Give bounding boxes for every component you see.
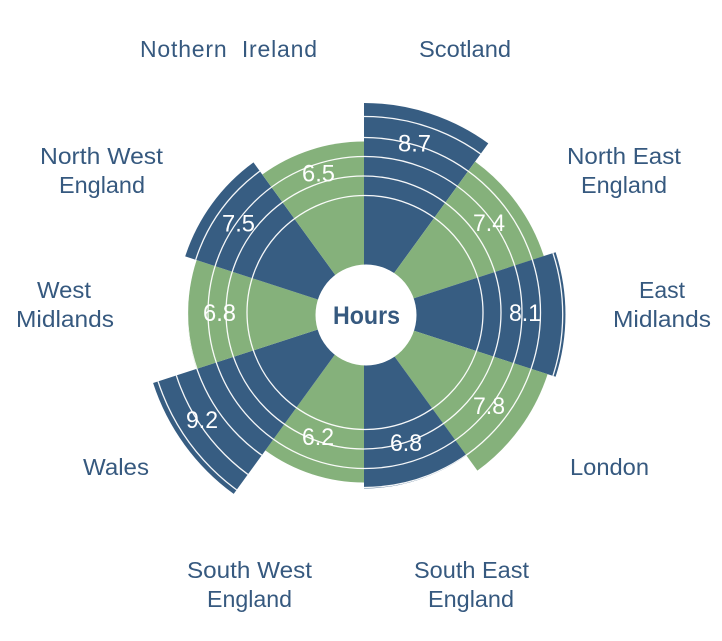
label: Wales: Wales bbox=[83, 454, 149, 480]
label: East Midlands bbox=[613, 277, 711, 332]
centre label: Hours bbox=[333, 302, 400, 330]
value: Wales: 9.2 bbox=[186, 407, 218, 434]
value: East Midlands: 8.1 bbox=[509, 300, 541, 327]
value: West Midlands: 6.8 bbox=[203, 300, 236, 327]
label: East Midlands: Midlands bbox=[613, 306, 711, 332]
wedge: London bbox=[364, 314, 548, 471]
value: South East England: 6.8 bbox=[390, 430, 422, 457]
label: South East England bbox=[414, 557, 530, 612]
label: North East England: North East bbox=[567, 143, 682, 169]
label: North East England: England bbox=[581, 172, 667, 198]
value: North East England: 7.4 bbox=[473, 210, 505, 237]
label: North East England bbox=[567, 143, 682, 198]
wedge: Scotland bbox=[364, 103, 488, 314]
wedge: South West England bbox=[265, 314, 364, 482]
label: South East England: South East bbox=[414, 557, 530, 583]
value: London: 7.8 bbox=[473, 393, 505, 420]
label: South West England: England bbox=[207, 586, 292, 612]
label: South West England bbox=[187, 557, 313, 612]
label: West Midlands: Midlands bbox=[16, 306, 114, 332]
wedge: North West England bbox=[185, 162, 364, 314]
label: London: London bbox=[570, 454, 649, 480]
label: North West England: North West bbox=[40, 143, 164, 169]
value: South West England: 6.2 bbox=[302, 424, 334, 451]
label: East Midlands: East bbox=[639, 277, 686, 303]
wedge: West Midlands bbox=[188, 260, 364, 369]
label: West Midlands bbox=[16, 277, 114, 332]
label: South West England: South West bbox=[187, 557, 313, 583]
label: South East England: England bbox=[428, 586, 514, 612]
wedge: East Midlands bbox=[364, 252, 565, 377]
label: North West England bbox=[40, 143, 164, 198]
wedge: South East England bbox=[364, 314, 466, 489]
label: North West England: England bbox=[59, 172, 145, 198]
label: West Midlands: West bbox=[37, 277, 92, 303]
wedge: Northern Ireland bbox=[262, 141, 364, 314]
value: Scotland: 8.7 bbox=[398, 130, 431, 158]
value: North West England: 7.5 bbox=[222, 210, 255, 238]
wedge: Wales bbox=[153, 314, 364, 494]
label: Northern Ireland: Nothern Ireland bbox=[140, 36, 317, 62]
label: Scotland: Scotland bbox=[419, 36, 511, 62]
value: Northern Ireland: 6.5 bbox=[302, 160, 335, 188]
polar chart bbox=[153, 103, 566, 494]
wedge: North East England bbox=[364, 162, 544, 314]
centre circle bbox=[316, 264, 416, 366]
